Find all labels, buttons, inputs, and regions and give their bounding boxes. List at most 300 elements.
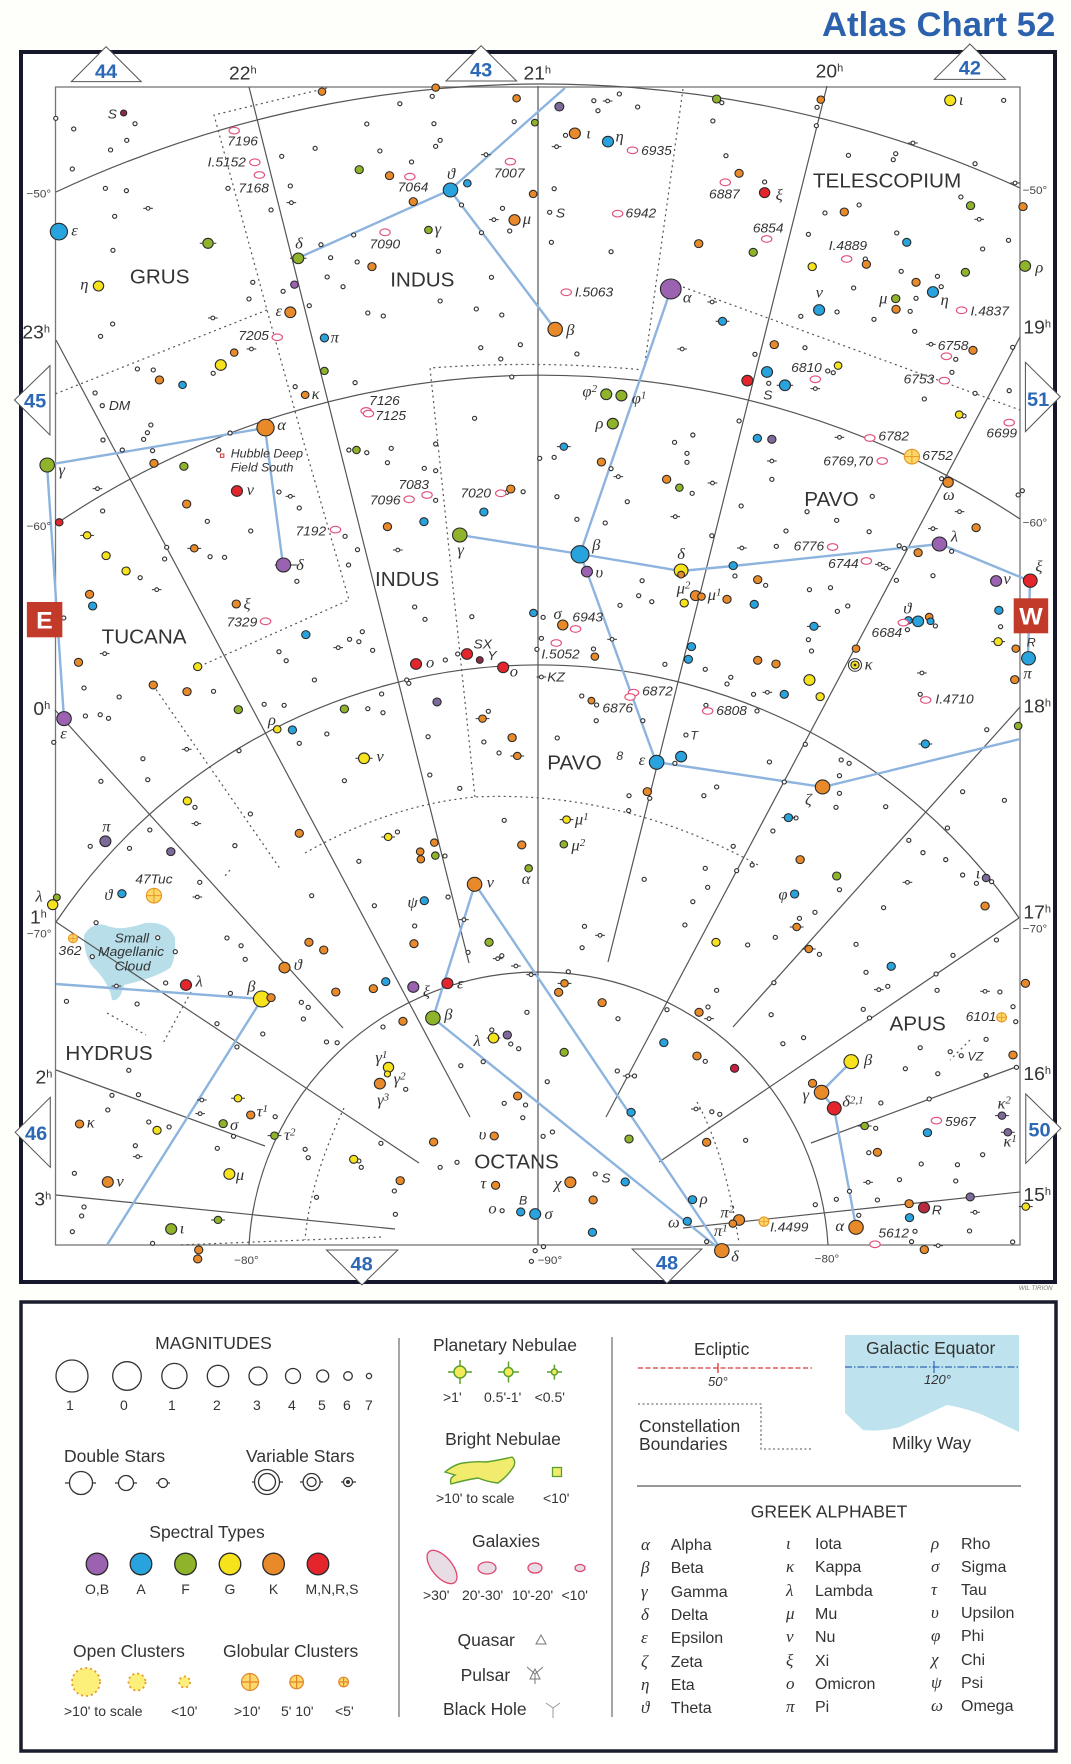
chart outer frame bbox=[21, 52, 1055, 1282]
sector: north-east stars and labels: φ bbox=[632, 389, 641, 407]
sector: south-west stars and labels bbox=[15, 865, 559, 1285]
legend: magnitudes: 7 bbox=[365, 1397, 373, 1413]
sector: north-west stars and labels: 7007 bbox=[494, 166, 525, 180]
sector: north-west stars and labels: 21 bbox=[523, 64, 545, 84]
sector: south-west stars and labels: 2 bbox=[400, 1070, 406, 1082]
constellation name: Pavo north: PAVO bbox=[804, 489, 859, 511]
sector: north-east stars and labels: I.4837 bbox=[971, 304, 1009, 318]
sector: north-east stars and labels: 20 bbox=[816, 62, 837, 82]
legend: bright nebulae: Bright Nebulae bbox=[445, 1429, 561, 1449]
sector: south-west stars and labels: 1 bbox=[30, 908, 41, 928]
sector: north-east stars and labels: I.5063 bbox=[575, 285, 614, 300]
east marker: E bbox=[36, 608, 53, 635]
sector: south-east stars and labels: δ bbox=[842, 1092, 850, 1111]
legend: galaxies: >30' bbox=[423, 1587, 449, 1603]
sector: middle-west stars and labels: 7020 bbox=[460, 486, 492, 500]
legend: milky way and galactic equator: Milky Way bbox=[892, 1433, 971, 1453]
sector: middle-east stars and labels: −60° bbox=[1023, 518, 1047, 530]
sector: middle-east stars and labels: μ bbox=[708, 585, 716, 604]
navigation arrow: chart 46 bbox=[15, 1097, 50, 1167]
sector: north-west stars and labels bbox=[14, 46, 551, 436]
navigation arrow: chart 45 bbox=[14, 366, 50, 435]
sector: south-west stars and labels: Magellanic bbox=[98, 944, 164, 959]
constellation name: Pavo south: PAVO bbox=[547, 753, 602, 774]
sector: north-east stars and labels: S bbox=[556, 206, 565, 220]
legend: greek alphabet: Zeta bbox=[671, 1654, 703, 1671]
sector: south-east stars and labels: ρ bbox=[699, 1189, 708, 1208]
sector: south-east stars and labels: S bbox=[601, 1171, 611, 1186]
legend: greek alphabet: Nu bbox=[815, 1629, 835, 1646]
legend: variable stars: Variable Stars bbox=[246, 1446, 355, 1466]
sector: south-east stars and labels: κ bbox=[1003, 1132, 1011, 1151]
sector: south-west stars and labels: β bbox=[246, 978, 256, 996]
sector: south-west stars and labels: γ bbox=[377, 1091, 384, 1109]
legend: open clusters: >10' to scale bbox=[64, 1703, 143, 1719]
sector: middle-east stars and labels: 6782 bbox=[878, 429, 910, 444]
sector: south-east stars and labels: 2 bbox=[1005, 1095, 1012, 1107]
sector: south-east stars and labels: h bbox=[1045, 1065, 1051, 1077]
sector: middle-east stars and labels: 6776 bbox=[794, 539, 825, 554]
sector: south-east stars and labels: ω bbox=[668, 1213, 680, 1232]
legend: greek alphabet: κ bbox=[786, 1557, 795, 1576]
navigation arrow: chart 44 bbox=[71, 47, 141, 83]
legend: greek alphabet: Delta bbox=[671, 1607, 708, 1624]
sector: south-east stars and labels: 6101 bbox=[966, 1009, 996, 1024]
sector: middle-east stars and labels: KZ bbox=[547, 670, 566, 685]
sector: middle-west stars and labels: ν bbox=[247, 481, 255, 499]
sector: middle-east stars and labels: σ bbox=[553, 604, 563, 623]
legend: planetary nebulae bbox=[433, 1335, 577, 1405]
legend: ecliptic bbox=[638, 1339, 812, 1389]
sector: middle-east stars and labels: ν bbox=[1003, 569, 1011, 588]
legend: greek alphabet: Gamma bbox=[671, 1584, 728, 1601]
sector: north-east stars and labels: h bbox=[837, 62, 843, 74]
sector: south-west stars and labels: ψ bbox=[407, 894, 419, 912]
legend: magnitudes: 2 bbox=[213, 1397, 221, 1413]
legend: magnitudes: 6 bbox=[343, 1397, 351, 1413]
sector: south-east stars and labels: κ bbox=[997, 1094, 1005, 1112]
navigation arrow: chart 42: 42 bbox=[959, 58, 981, 80]
sector: middle-west stars and labels: ξ bbox=[243, 595, 251, 613]
sector: north-east stars and labels: 2 bbox=[592, 383, 598, 395]
legend panel bbox=[21, 1302, 1056, 1751]
legend: open clusters: Open Clusters bbox=[73, 1641, 185, 1661]
legend: spectral types: F bbox=[181, 1581, 190, 1597]
sector: south-west stars and labels: Cloud bbox=[115, 959, 151, 973]
sector: north-west stars and labels: ε bbox=[276, 302, 283, 320]
legend: magnitudes bbox=[56, 1333, 373, 1413]
legend: pulsar: Pulsar bbox=[461, 1665, 510, 1685]
sector: north-east stars and labels: I.4889 bbox=[829, 238, 868, 253]
sector: south-west stars and labels: B bbox=[519, 1193, 527, 1207]
navigation arrow: chart 48 left bbox=[326, 1250, 398, 1285]
legend: magnitudes: 1 bbox=[66, 1397, 74, 1413]
legend: greek alphabet: ζ bbox=[641, 1652, 649, 1671]
sector: south-west stars and labels: 1 bbox=[263, 1103, 268, 1115]
sector: middle-west stars and labels: Hubble Deep bbox=[231, 447, 303, 461]
sector: north-east stars and labels: β bbox=[565, 320, 575, 339]
sector: north-east stars and labels: 6699 bbox=[986, 425, 1018, 440]
legend: quasar bbox=[458, 1630, 546, 1650]
sector: north-east stars and labels: h bbox=[1045, 318, 1051, 330]
legend: greek alphabet: λ bbox=[785, 1581, 793, 1600]
navigation arrow: chart 46: 46 bbox=[25, 1123, 47, 1145]
legend: bright nebulae bbox=[436, 1429, 569, 1506]
west marker: W bbox=[1019, 604, 1044, 631]
sector: middle-west stars and labels: π bbox=[102, 818, 111, 836]
legend: greek alphabet: Omicron bbox=[815, 1676, 875, 1693]
sector: north-east stars and labels: φ bbox=[582, 382, 592, 401]
legend: greek alphabet: Pi bbox=[815, 1699, 829, 1716]
sector: middle-east stars and labels: 1 bbox=[716, 586, 722, 598]
sector: south-west stars and labels: −70° bbox=[27, 929, 51, 941]
sector: middle-east stars and labels: ϑ bbox=[903, 599, 912, 617]
sector: middle-east stars and labels: h bbox=[1045, 698, 1051, 710]
sector: middle-east stars and labels: 2 bbox=[685, 580, 691, 592]
sector: north-east stars and labels: 6810 bbox=[791, 360, 822, 375]
east marker bbox=[27, 602, 62, 637]
legend: greek alphabet: γ bbox=[641, 1582, 649, 1601]
sector: south-west stars and labels: σ bbox=[230, 1116, 239, 1134]
globular cluster NGC 362 bbox=[69, 934, 77, 943]
sector: middle-east stars and labels: 6872 bbox=[642, 684, 673, 698]
constellation boundaries bbox=[55, 88, 1020, 1245]
legend: greek alphabet: σ bbox=[931, 1557, 940, 1576]
sector: south-west stars and labels: h bbox=[41, 908, 47, 920]
sector: south-east stars and labels: σ bbox=[544, 1204, 554, 1223]
sector: middle-east stars and labels: κ bbox=[865, 655, 873, 673]
sector: middle-east stars and labels: λ bbox=[950, 527, 958, 546]
sector: middle-west stars and labels: 7329 bbox=[227, 615, 258, 629]
sector: south-east stars and labels bbox=[530, 863, 1061, 1292]
sector: south-east stars and labels: −80° bbox=[815, 1253, 839, 1265]
legend: greek alphabet: GREEK ALPHABET bbox=[751, 1502, 908, 1522]
sector: south-east stars and labels: h bbox=[1045, 1186, 1051, 1198]
legend: spectral types: M,N,R,S bbox=[306, 1581, 358, 1597]
legend: milky way and galactic equator: 120° bbox=[924, 1372, 951, 1387]
sector: south-west stars and labels: κ bbox=[87, 1114, 95, 1132]
navigation arrow: chart 51: 51 bbox=[1027, 389, 1049, 411]
navigation arrow: chart 51 bbox=[1025, 362, 1060, 432]
sector: north-east stars and labels: 6758 bbox=[938, 338, 969, 353]
sector: south-east stars and labels: π bbox=[720, 1203, 729, 1221]
sector: south-west stars and labels: 47Tuc bbox=[135, 872, 173, 886]
sector: north-east stars and labels: α bbox=[683, 288, 692, 307]
legend: planetary nebulae: 0.5'-1' bbox=[484, 1389, 521, 1405]
sector: middle-east stars and labels: ω bbox=[943, 485, 955, 504]
sector: south-west stars and labels: ν bbox=[116, 1173, 125, 1191]
sector: middle-east stars and labels: υ bbox=[596, 563, 603, 582]
legend: galaxies: 10'-20' bbox=[512, 1587, 553, 1603]
legend: greek alphabet: Iota bbox=[815, 1536, 842, 1553]
navigation arrow: chart 42 bbox=[934, 44, 1005, 80]
legend: spectral types: G bbox=[225, 1581, 235, 1597]
sector: south-west stars and labels: λ bbox=[473, 1032, 481, 1050]
sector: north-east stars and labels: η bbox=[941, 290, 949, 309]
sector: south-west stars and labels: 1 bbox=[382, 1049, 387, 1061]
globular cluster 47 Tucanae bbox=[146, 888, 162, 903]
legend: greek alphabet: Omega bbox=[961, 1698, 1014, 1715]
sector: north-east stars and labels: S bbox=[763, 388, 772, 402]
legend: open clusters: <10' bbox=[171, 1703, 197, 1719]
sector: north-east stars and labels: ξ bbox=[776, 185, 783, 204]
sector: middle-east stars and labels: β bbox=[591, 535, 601, 554]
sector: middle-west stars and labels: SX bbox=[474, 637, 493, 651]
sector: north-east stars and labels: 1 bbox=[641, 390, 646, 402]
sector: south-east stars and labels: 5612 bbox=[878, 1226, 910, 1240]
legend: bright nebulae: <10' bbox=[543, 1490, 569, 1506]
sector: north-east stars and labels: η bbox=[616, 127, 624, 146]
legend: greek alphabet: β bbox=[640, 1558, 650, 1577]
legend: greek alphabet: Epsilon bbox=[671, 1630, 723, 1647]
sector: south-west stars and labels: ε bbox=[457, 975, 464, 992]
credit: WIL TIRION bbox=[1019, 1285, 1053, 1292]
sector: south-west stars and labels: λ bbox=[195, 973, 203, 991]
sector: north-east stars and labels: ι bbox=[959, 90, 964, 109]
sector: south-west stars and labels: 2 bbox=[290, 1126, 296, 1138]
sector: south-east stars and labels: φ bbox=[778, 885, 788, 903]
legend: milky way and galactic equator: Galactic Equator bbox=[866, 1338, 996, 1358]
sector: south-west stars and labels: 3 bbox=[383, 1091, 390, 1103]
sector: middle-west stars and labels: o bbox=[510, 663, 518, 681]
sector: north-east stars and labels: 6887 bbox=[709, 187, 740, 201]
sector: south-west stars and labels: ν bbox=[487, 874, 495, 891]
legend: greek alphabet: π bbox=[786, 1697, 795, 1716]
legend: greek alphabet: Theta bbox=[671, 1700, 712, 1717]
legend: greek alphabet: ε bbox=[641, 1628, 648, 1647]
legend: constellation boundaries bbox=[638, 1404, 811, 1454]
sector: south-west stars and labels: γ bbox=[394, 1070, 400, 1088]
sector: south-east stars and labels: 15 bbox=[1023, 1185, 1045, 1206]
sector: south-east stars and labels: 1 bbox=[722, 1222, 728, 1234]
legend: greek alphabet: Phi bbox=[961, 1628, 984, 1645]
navigation arrow: chart 48 right bbox=[632, 1249, 702, 1283]
sector: middle-east stars and labels: ξ bbox=[1035, 557, 1043, 576]
legend: spectral types: A bbox=[136, 1581, 146, 1597]
legend: greek alphabet: τ bbox=[931, 1580, 938, 1599]
navigation arrow: chart 45: 45 bbox=[24, 391, 46, 412]
legend: greek alphabet: ν bbox=[786, 1627, 794, 1646]
sector: north-west stars and labels: 7126 bbox=[369, 393, 400, 408]
sector: middle-east stars and labels: I.4710 bbox=[935, 692, 974, 706]
globular cluster I.4499 bbox=[759, 1217, 769, 1226]
sector: north-east stars and labels: ν bbox=[816, 283, 824, 302]
legend: open clusters bbox=[64, 1641, 197, 1719]
sector: south-east stars and labels: α bbox=[835, 1216, 844, 1235]
legend: greek alphabet: ρ bbox=[930, 1534, 939, 1553]
sector: middle-east stars and labels: 6808 bbox=[716, 703, 747, 718]
legend: greek alphabet: Psi bbox=[961, 1675, 983, 1692]
legend: greek alphabet: υ bbox=[931, 1603, 939, 1622]
navigation arrow: chart 48 right: 48 bbox=[656, 1253, 678, 1274]
sector: north-west stars and labels: 7196 bbox=[227, 134, 258, 148]
sector: south-west stars and labels: β bbox=[443, 1006, 453, 1023]
sector: south-west stars and labels: ϑ bbox=[294, 956, 303, 974]
constellation figure lines bbox=[47, 88, 1030, 1251]
sector: middle-west stars and labels: 0 bbox=[33, 699, 44, 720]
legend: greek alphabet: ο bbox=[786, 1674, 794, 1693]
coordinate grid bbox=[55, 84, 1020, 1245]
sector: middle-west stars and labels: ρ bbox=[267, 711, 276, 729]
sector: north-west stars and labels: 7205 bbox=[238, 328, 269, 343]
sector: middle-east stars and labels: 6684 bbox=[872, 625, 903, 640]
sector: south-west stars and labels: o bbox=[488, 1200, 497, 1217]
sector: north-west stars and labels: κ bbox=[312, 385, 320, 403]
constellation name: Hydrus: HYDRUS bbox=[65, 1043, 153, 1065]
legend: globular clusters: >10' bbox=[234, 1703, 260, 1719]
sector: middle-east stars and labels: 6744 bbox=[828, 556, 859, 571]
sector: middle-west stars and labels: γ bbox=[59, 461, 66, 479]
legend: pulsar bbox=[461, 1665, 543, 1685]
sector: middle-east stars and labels: 8 bbox=[616, 749, 623, 763]
legend: galaxies: <10' bbox=[562, 1587, 588, 1603]
legend: magnitudes: 0 bbox=[120, 1397, 128, 1413]
sector: north-west stars and labels: μ bbox=[522, 210, 531, 228]
legend: globular clusters bbox=[223, 1641, 358, 1719]
legend: magnitudes: MAGNITUDES bbox=[155, 1333, 272, 1353]
legend: greek alphabet: χ bbox=[929, 1650, 939, 1669]
sector: north-east stars and labels: 6753 bbox=[904, 372, 935, 386]
sector: north-west stars and labels: 7064 bbox=[398, 180, 429, 194]
legend: black hole: Black Hole bbox=[443, 1699, 527, 1719]
sector: middle-east stars and labels: 2 bbox=[580, 837, 586, 849]
sector: south-west stars and labels: ξ bbox=[423, 983, 430, 1001]
sector: north-west stars and labels: −50° bbox=[27, 188, 51, 200]
sector: north-west stars and labels: γ bbox=[435, 220, 442, 238]
legend: ecliptic: Ecliptic bbox=[694, 1339, 750, 1359]
sector: south-west stars and labels: μ bbox=[235, 1166, 244, 1184]
sector: middle-east stars and labels: 6876 bbox=[602, 701, 634, 716]
constellation name: Indus north: INDUS bbox=[390, 270, 454, 292]
Small Magellanic Cloud shape bbox=[84, 923, 175, 1000]
legend: globular clusters: <5' bbox=[335, 1703, 354, 1719]
sector: middle-west stars and labels bbox=[27, 431, 526, 863]
legend: greek alphabet: Upsilon bbox=[961, 1605, 1014, 1622]
sector: north-east stars and labels: −50° bbox=[1023, 185, 1047, 197]
sector: south-east stars and labels: γ bbox=[803, 1085, 810, 1104]
legend: greek alphabet: Mu bbox=[815, 1606, 837, 1623]
sector: middle-east stars and labels: 6943 bbox=[572, 610, 604, 624]
sector: north-west stars and labels: 7090 bbox=[370, 237, 401, 251]
sector: south-east stars and labels: 5967 bbox=[945, 1114, 976, 1129]
legend: spectral types: Spectral Types bbox=[149, 1522, 265, 1542]
globular cluster NGC 6752 bbox=[904, 449, 920, 464]
sector: south-east stars and labels: R bbox=[932, 1203, 942, 1217]
legend: magnitudes: 5 bbox=[318, 1397, 326, 1413]
legend: greek alphabet: Alpha bbox=[671, 1537, 712, 1554]
legend: planetary nebulae: <0.5' bbox=[535, 1389, 565, 1405]
sector: south-east stars and labels: δ bbox=[731, 1247, 739, 1266]
navigation arrow: chart 50 bbox=[1026, 1094, 1061, 1163]
west marker bbox=[1014, 598, 1048, 633]
sector: south-west stars and labels: γ bbox=[375, 1049, 382, 1067]
sector: south-east stars and labels: ι bbox=[976, 864, 981, 882]
legend: spectral types: O,B bbox=[85, 1581, 109, 1597]
sector: south-east stars and labels: h bbox=[1045, 903, 1051, 915]
sector: north-west stars and labels: h bbox=[44, 323, 50, 335]
sector: middle-east stars and labels: μ bbox=[571, 836, 580, 855]
legend: magnitudes: 3 bbox=[253, 1397, 261, 1413]
sector: middle-east stars and labels: μ bbox=[677, 579, 685, 597]
legend: greek alphabet: ξ bbox=[786, 1651, 794, 1670]
constellation name: Tucana: TUCANA bbox=[102, 627, 187, 648]
sector: south-east stars and labels: 17 bbox=[1023, 903, 1045, 923]
legend: planetary nebulae: >1' bbox=[443, 1389, 462, 1405]
sector: middle-east stars and labels: ε bbox=[639, 750, 646, 769]
legend: greek alphabet: α bbox=[641, 1535, 651, 1554]
sector: middle-west stars and labels: −60° bbox=[27, 521, 51, 533]
sector: south-west stars and labels: υ bbox=[479, 1126, 486, 1143]
sector: middle-west stars and labels: Field South bbox=[231, 461, 294, 474]
sector: south-west stars and labels: h bbox=[46, 1068, 52, 1080]
sector: north-east stars and labels: 19 bbox=[1023, 318, 1045, 338]
legend: greek alphabet: ω bbox=[931, 1696, 943, 1715]
sector: north-west stars and labels: 22 bbox=[229, 64, 250, 84]
legend: galaxies bbox=[421, 1531, 588, 1603]
sector: north-east stars and labels: μ bbox=[878, 289, 887, 307]
sector: south-east stars and labels: −70° bbox=[1023, 924, 1047, 936]
sector: north-west stars and labels: h bbox=[545, 64, 551, 76]
sector: south-west stars and labels: 3 bbox=[34, 1190, 45, 1211]
sector: middle-west stars and labels: δ bbox=[296, 556, 304, 574]
legend: greek alphabet: Rho bbox=[961, 1536, 990, 1553]
sector: middle-east stars and labels: T bbox=[690, 728, 700, 742]
sector: middle-west stars and labels: Y bbox=[487, 648, 497, 663]
legend: quasar: Quasar bbox=[458, 1630, 515, 1650]
sector: middle-east stars and labels: 6769,70 bbox=[823, 454, 874, 469]
legend: greek alphabet: η bbox=[641, 1675, 649, 1694]
sector: north-east stars and labels: 6942 bbox=[626, 206, 657, 220]
legend: globular clusters: 5' 10' bbox=[281, 1703, 314, 1719]
sector: south-west stars and labels: α bbox=[522, 870, 531, 888]
navigation arrow: chart 44: 44 bbox=[95, 61, 117, 83]
constellation name: Grus: GRUS bbox=[130, 267, 190, 288]
sector: middle-east stars and labels: I.5052 bbox=[541, 647, 580, 662]
legend: greek alphabet: Xi bbox=[815, 1653, 829, 1670]
legend: magnitudes: 4 bbox=[288, 1397, 296, 1413]
legend: greek alphabet: Lambda bbox=[815, 1583, 873, 1600]
sector: north-west stars and labels: 7168 bbox=[238, 181, 269, 196]
sector: north-west stars and labels: α bbox=[277, 416, 286, 434]
sector: middle-east stars and labels: 1 bbox=[583, 811, 589, 823]
sector: middle-east stars and labels: 18 bbox=[1023, 697, 1045, 718]
sector: south-west stars and labels: τ bbox=[284, 1126, 290, 1144]
sector: south-west stars and labels: ϑ bbox=[104, 886, 113, 904]
legend: greek alphabet: ι bbox=[786, 1534, 791, 1553]
legend: galaxies: Galaxies bbox=[472, 1531, 540, 1551]
sector: middle-west stars and labels: o bbox=[426, 654, 434, 672]
chart plot boundary bbox=[56, 87, 1020, 1245]
constellation name: Indus south: INDUS bbox=[375, 569, 439, 591]
sector: north-west stars and labels: δ bbox=[295, 235, 303, 252]
legend: constellation boundaries: Constellation bbox=[639, 1416, 740, 1436]
sector: south-west stars and labels: −80° bbox=[234, 1255, 259, 1267]
sector: north-west stars and labels: I.5152 bbox=[208, 155, 246, 169]
sector: south-west stars and labels: ι bbox=[180, 1220, 185, 1237]
sector: south-east stars and labels: 16 bbox=[1023, 1064, 1045, 1085]
sector: north-west stars and labels: 7125 bbox=[375, 408, 406, 423]
legend: greek alphabet: μ bbox=[785, 1604, 795, 1623]
sector: south-west stars and labels: 362 bbox=[59, 943, 82, 958]
sector: south-east stars and labels: χ bbox=[552, 1174, 562, 1192]
legend: greek alphabet: Eta bbox=[671, 1677, 695, 1694]
sector: south-east stars and labels: 2,1 bbox=[850, 1094, 864, 1106]
sector: south-west stars and labels: τ bbox=[480, 1175, 488, 1192]
sector: middle-east stars and labels: π bbox=[1023, 664, 1033, 682]
legend: greek alphabet: Beta bbox=[671, 1560, 704, 1577]
constellation name: Octans: OCTANS bbox=[474, 1152, 559, 1173]
sector: middle-west stars and labels: 7192 bbox=[295, 524, 327, 538]
